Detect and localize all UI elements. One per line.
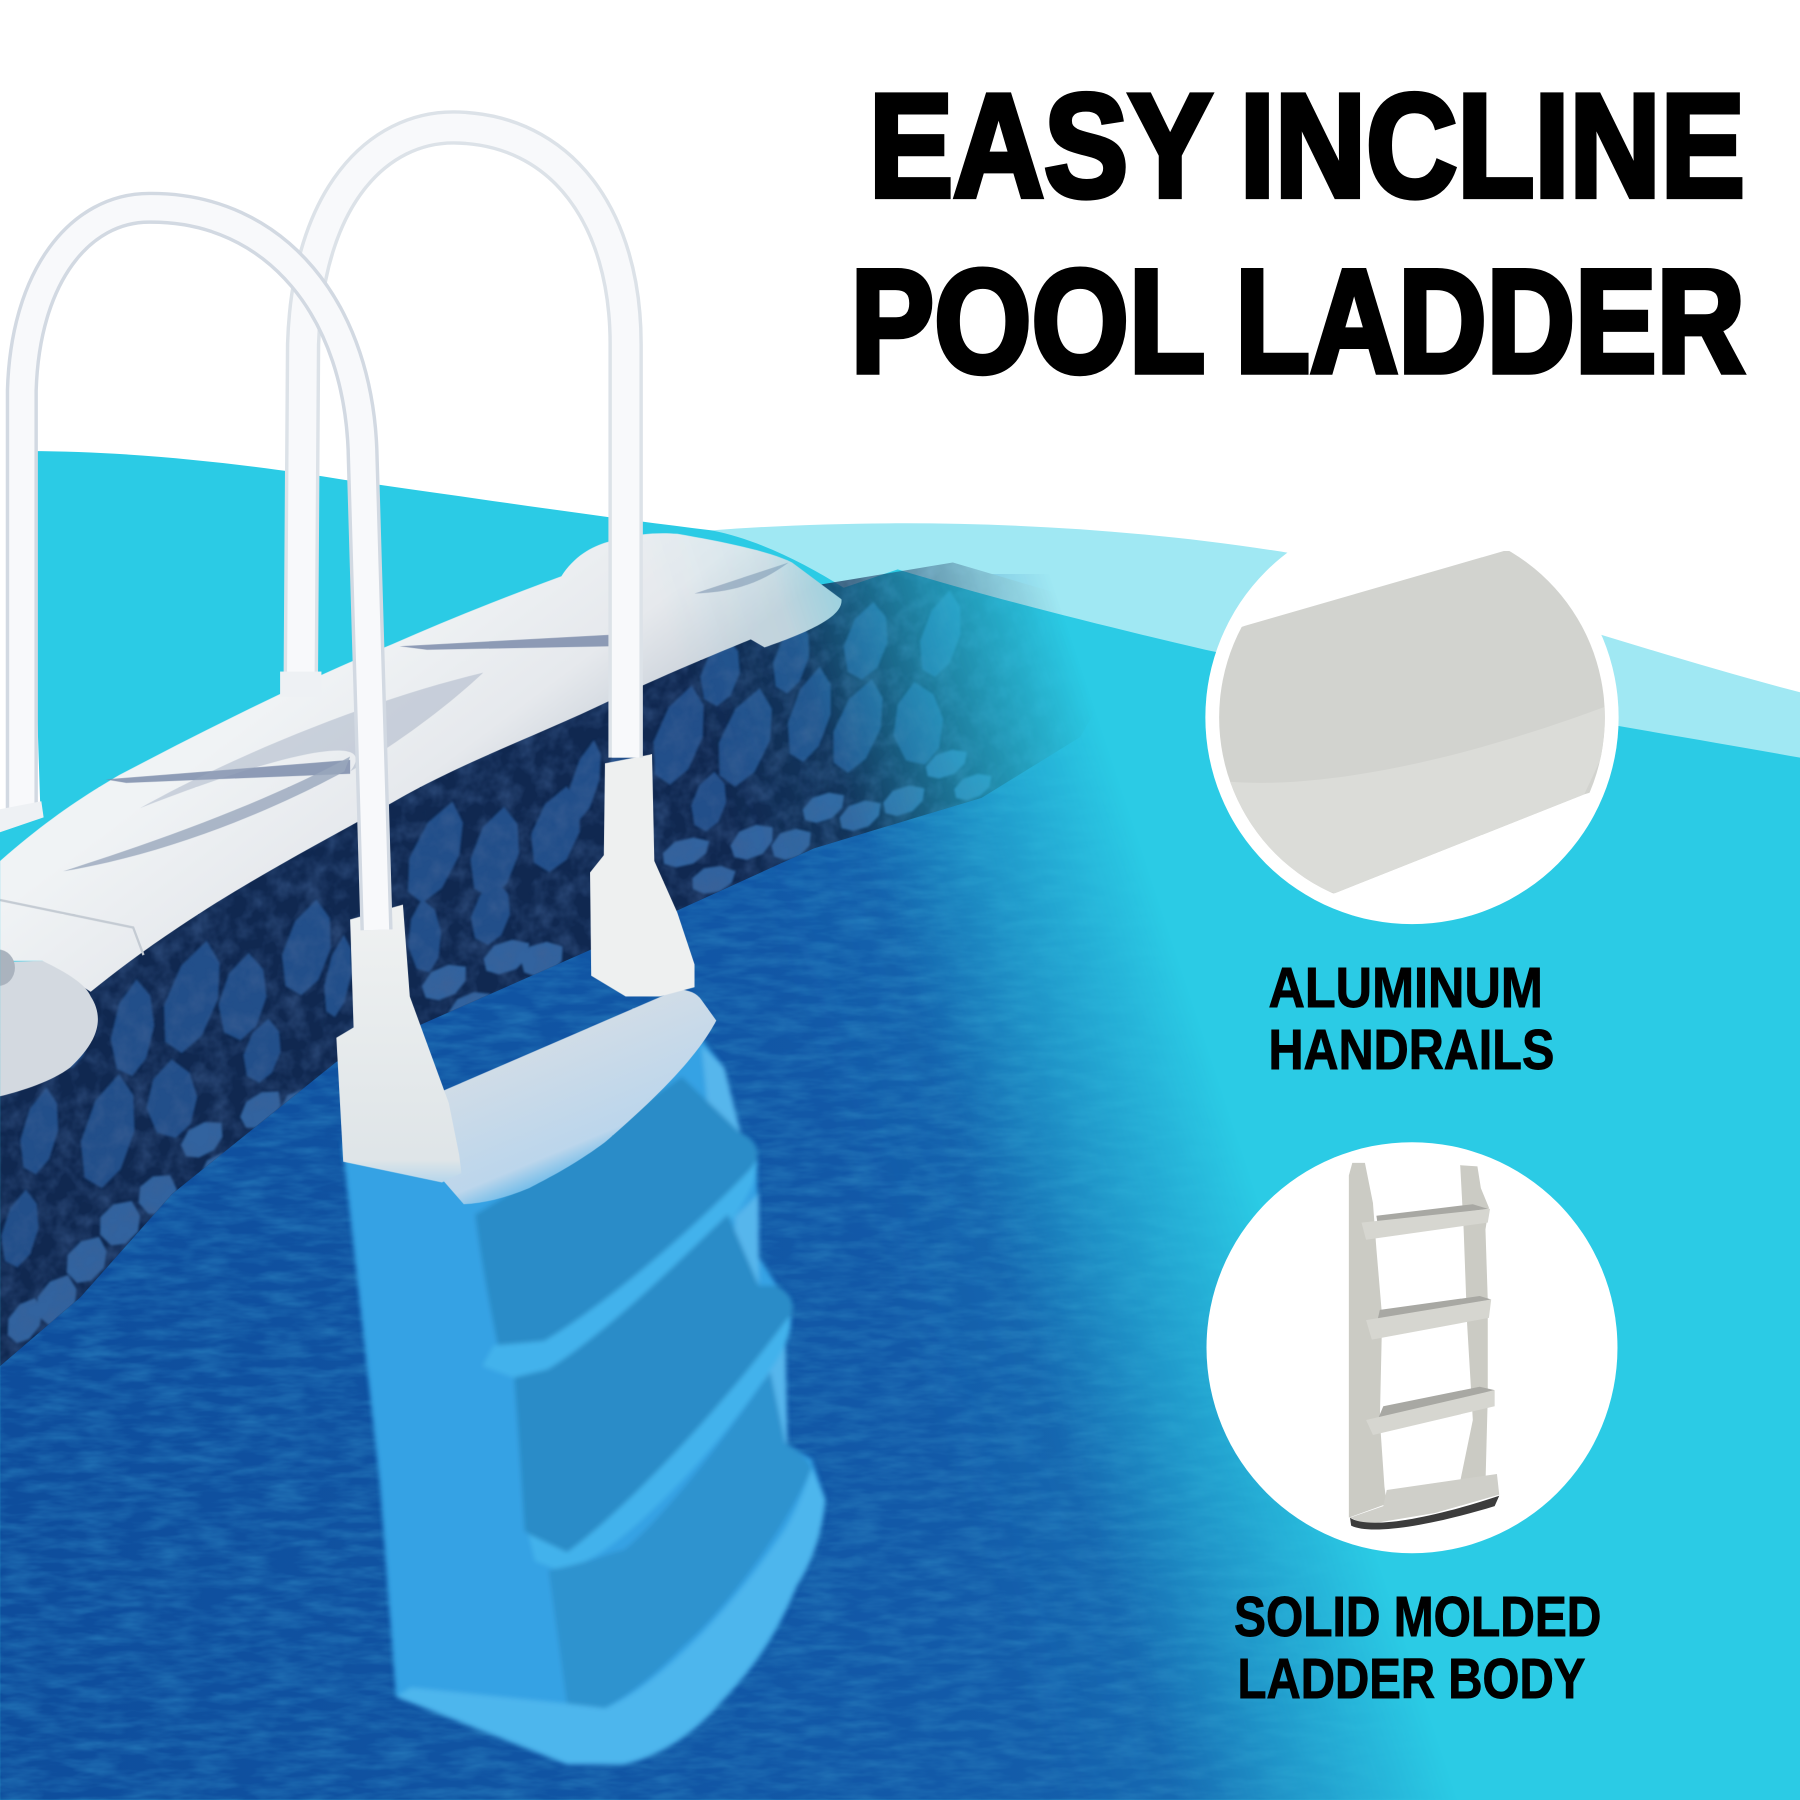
label: solid molded ladder body: SOLID MOLDED — [1234, 1585, 1601, 1648]
label: aluminum handrails: ALUMINUM — [1268, 956, 1543, 1019]
light water band — [712, 523, 1800, 804]
rock wall liner — [0, 551, 1148, 1378]
ladder body underwater — [342, 1039, 825, 1764]
deck seam — [0, 900, 143, 955]
panel: aluminum handrails — [1194, 511, 1630, 1081]
icon: aluminum rail close-up — [1219, 551, 1605, 894]
title: EASY — [869, 64, 1212, 228]
step supports — [701, 1046, 788, 1449]
front handrail — [22, 208, 377, 930]
step 3 — [514, 1215, 793, 1564]
front ladder post — [336, 905, 461, 1182]
right side panel — [1458, 1165, 1489, 1492]
pool deck top rail — [0, 533, 842, 992]
deck end cap connector — [0, 949, 98, 1096]
pool floor — [0, 574, 1430, 1800]
ladder top step — [441, 990, 716, 1204]
panel: solid molded ladder body — [1207, 1142, 1617, 1710]
label: aluminum handrails — [1268, 956, 1554, 1081]
rear handrail — [301, 127, 626, 758]
label: solid molded ladder body: LADDER BODY — [1238, 1647, 1585, 1710]
label: solid molded ladder body — [1234, 1585, 1601, 1710]
handrails — [0, 127, 626, 930]
ladder treads — [1350, 1204, 1499, 1530]
white circle — [1207, 1142, 1617, 1553]
pool photo: fading into the cyan water — [0, 533, 1430, 1800]
step 4 — [549, 1372, 812, 1708]
step 2 — [475, 1077, 758, 1374]
rail sockets — [0, 672, 321, 832]
white circle — [1205, 511, 1619, 924]
icon: ladder product — [1349, 1163, 1499, 1530]
cyan water background — [0, 451, 1800, 1800]
title — [851, 64, 1745, 404]
label: aluminum handrails: HANDRAILS — [1268, 1018, 1554, 1081]
rear ladder post — [590, 754, 695, 996]
left side panel — [1349, 1163, 1387, 1518]
title: POOL — [851, 240, 1205, 404]
deck shadow streaks — [106, 635, 611, 783]
